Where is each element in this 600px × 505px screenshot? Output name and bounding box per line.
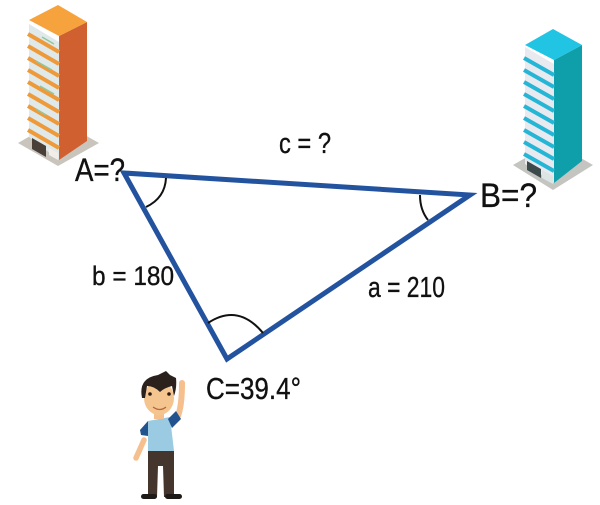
angle arc A (146, 178, 166, 207)
label b: b = 180 (92, 261, 174, 291)
label B: B=? (480, 177, 537, 215)
label C angle: C=39.4° (206, 371, 301, 406)
triangle (124, 173, 470, 359)
angle arc C (208, 315, 263, 333)
icon: teal building (513, 29, 593, 190)
icon: person waving (136, 371, 182, 499)
label A: A=? (75, 152, 125, 188)
icon: orange building (18, 5, 99, 166)
label c: c = ? (279, 128, 331, 160)
label a: a = 210 (368, 272, 445, 304)
angle arc B (420, 195, 428, 220)
